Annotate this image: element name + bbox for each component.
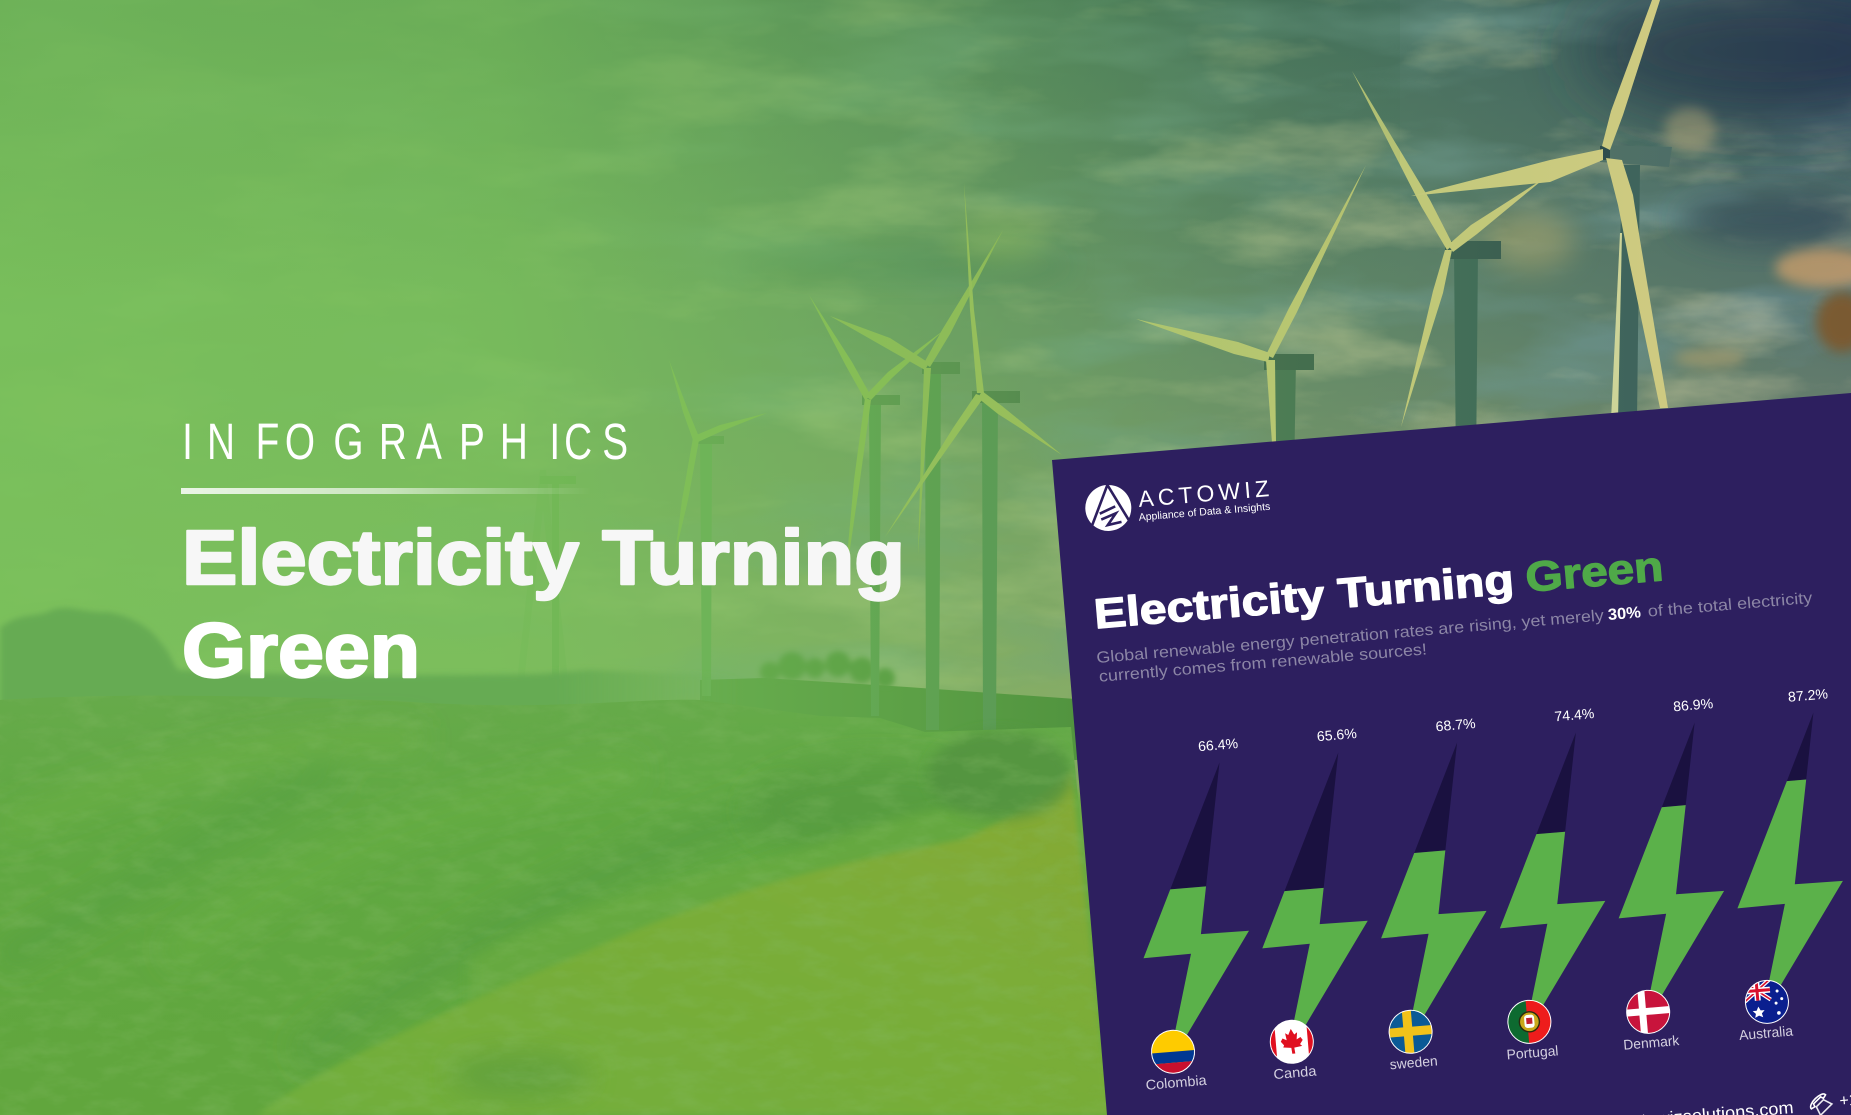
turbines bbox=[515, 0, 1672, 732]
hill: dark patch foreground bbox=[450, 1053, 590, 1097]
divider rule bbox=[181, 488, 591, 494]
turbine: far left with lattice pylon bbox=[515, 470, 576, 700]
hill: ridge highlights and folds bbox=[0, 738, 800, 1060]
turbine 7 bbox=[669, 360, 767, 696]
hill: grass texture bbox=[0, 690, 1120, 1115]
turbine 4 bbox=[885, 183, 1062, 732]
turbine 6 bbox=[809, 295, 944, 716]
bolt column: Australia 87.2%: 87.2% bbox=[1787, 685, 1829, 705]
bolt column: Colombia 66.4%: 66.4% bbox=[1197, 735, 1239, 754]
bolt column: Portugal 74.4%: 74.4% bbox=[1554, 705, 1595, 724]
bolt column: Colombia 66.4%: Colombia bbox=[1145, 1072, 1207, 1093]
bolt column: Colombia 66.4% bbox=[1144, 738, 1249, 1090]
main heading: Electricity Turning bbox=[182, 515, 905, 601]
bolt column: Canada 65.6%: Canda bbox=[1273, 1063, 1317, 1082]
bolt column: Canada 65.6%: 65.6% bbox=[1316, 725, 1357, 744]
bolt column: Canada 65.6% bbox=[1262, 728, 1368, 1079]
distant land band left with tree line bbox=[0, 608, 740, 720]
turbine 1: large right bbox=[1411, 0, 1672, 420]
eyebrow: INFOGRAPHICS: INFOGRAPHICS bbox=[182, 413, 628, 470]
bolt column: Sweden 68.7%: sweden bbox=[1389, 1052, 1438, 1072]
icon: logo mark bbox=[1083, 483, 1133, 533]
turbine 2 bbox=[1352, 71, 1546, 470]
poster background bbox=[1052, 393, 1851, 1115]
logo: Actowiz bbox=[1083, 472, 1271, 533]
icon: phone bbox=[1808, 1092, 1833, 1115]
bolt column: Australia 87.2%: Australia bbox=[1738, 1023, 1794, 1043]
bolt column: Denmark 86.9%: Denmark bbox=[1623, 1032, 1681, 1053]
bolt column: Portugal 74.4%: Portugal bbox=[1506, 1042, 1559, 1063]
main heading: Green bbox=[182, 608, 420, 694]
logo: Actowiz: ACTOWIZ bbox=[1137, 475, 1270, 512]
logo: Actowiz: Appliance of Data & Insights bbox=[1138, 501, 1271, 524]
bolt column: Portugal 74.4% bbox=[1500, 708, 1606, 1060]
poster: tilted infographic preview bbox=[1052, 393, 1851, 1115]
bolt column: Denmark 86.9%: 86.9% bbox=[1673, 695, 1714, 714]
poster subtitle: currently comes from renewable sources! bbox=[1098, 641, 1428, 686]
hill: middle ridge bbox=[470, 790, 1110, 1115]
bolt column: Sweden 68.7%: 68.7% bbox=[1435, 715, 1476, 734]
poster title bbox=[1092, 542, 1665, 637]
hill: dark bush bbox=[928, 731, 1072, 819]
bolt column: Denmark 86.9% bbox=[1618, 698, 1724, 1050]
bolt column: Australia 87.2% bbox=[1738, 689, 1843, 1040]
main heading bbox=[182, 515, 905, 694]
bolt column: Sweden 68.7% bbox=[1381, 718, 1486, 1070]
poster title: Green bbox=[1524, 542, 1665, 601]
turbine 5 bbox=[830, 230, 1003, 730]
turbine 3 bbox=[1136, 165, 1366, 480]
poster subtitle: 30% bbox=[1607, 604, 1642, 624]
poster title: Electricity Turning bbox=[1092, 555, 1516, 637]
poster content bbox=[1082, 426, 1851, 1115]
top shading over sky bbox=[0, 0, 1400, 300]
poster subtitle bbox=[1096, 590, 1815, 686]
distant land band right bbox=[700, 678, 1090, 760]
hills foreground bbox=[0, 690, 1120, 1115]
poster subtitle: of the total electricity bbox=[1647, 590, 1813, 621]
hill: dark fold bbox=[750, 760, 1010, 860]
hill: main grassy slope bbox=[0, 696, 1110, 1115]
distant tree cluster right bbox=[760, 651, 895, 688]
poster subtitle: Global renewable energy penetration rates are rising, yet merely bbox=[1096, 607, 1604, 667]
hill: bright foreground slope bbox=[257, 770, 1110, 1115]
